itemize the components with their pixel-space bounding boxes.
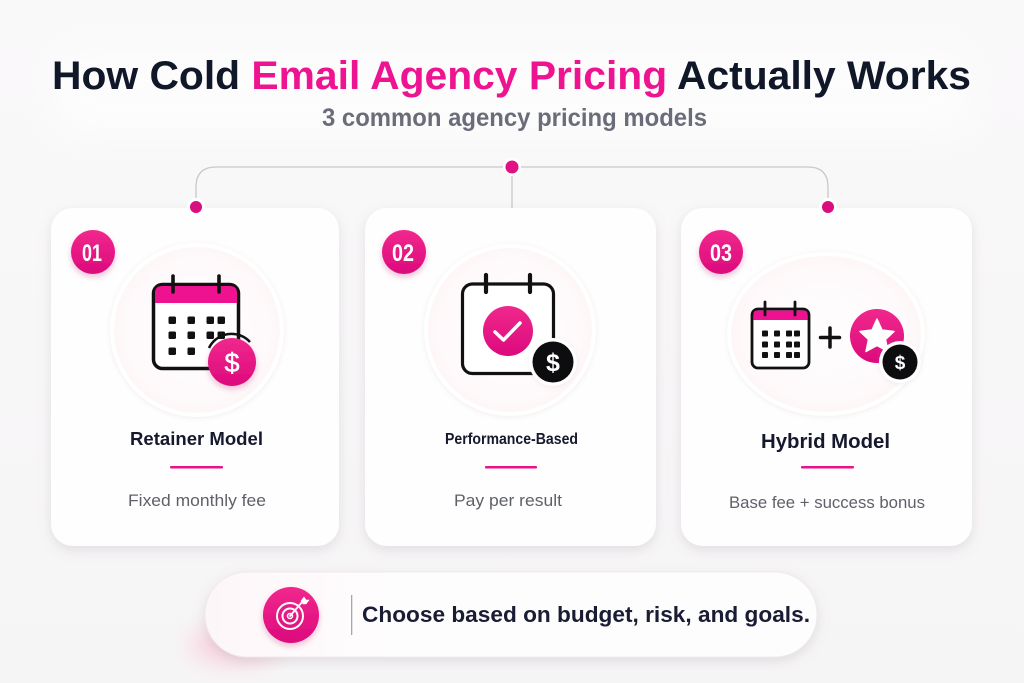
card description: Pay per result (454, 491, 562, 510)
pill glow (190, 627, 280, 663)
callout text: Choose based on budget, risk, and goals. (362, 602, 810, 627)
icon: calendar with dollar: $ (224, 348, 240, 378)
badge 02 (382, 230, 426, 274)
accent line (170, 466, 223, 468)
icon disc 1 (112, 245, 282, 415)
badge 03 (699, 230, 743, 274)
accent line (801, 466, 854, 468)
card heading: Performance-Based (445, 431, 578, 448)
panel: performance-based (365, 208, 656, 546)
icon: calendar with check (462, 275, 577, 386)
panel: hybrid model (681, 208, 972, 546)
panel: retainer model (51, 208, 339, 546)
badge 03: 03 (710, 240, 732, 267)
title: How Cold Email Agency Pricing Actually Works (52, 54, 971, 98)
icon: target (263, 587, 319, 643)
card heading: Retainer Model (130, 429, 263, 449)
icon: calendar with check: $ (546, 349, 560, 377)
icon: calendar plus star bonus (752, 302, 921, 383)
accent line (485, 466, 537, 468)
badge 01 (71, 230, 115, 274)
card description: Base fee + success bonus (729, 493, 925, 512)
icon: calendar with dollar (154, 276, 256, 386)
icon disc 3 (729, 254, 923, 414)
badge 02: 02 (392, 240, 414, 267)
connector lines (196, 167, 828, 208)
title glow (50, 50, 975, 135)
icon disc 2 (426, 246, 594, 414)
callout: choose based on (205, 572, 817, 657)
icon: calendar plus star bonus: $ (895, 353, 906, 374)
divider (351, 595, 352, 635)
card description: Fixed monthly fee (128, 491, 266, 510)
subtitle: 3 common agency pricing models (322, 104, 707, 132)
badge 01: 01 (82, 240, 102, 267)
card heading: Hybrid Model (761, 431, 890, 453)
connector dots (187, 158, 837, 216)
